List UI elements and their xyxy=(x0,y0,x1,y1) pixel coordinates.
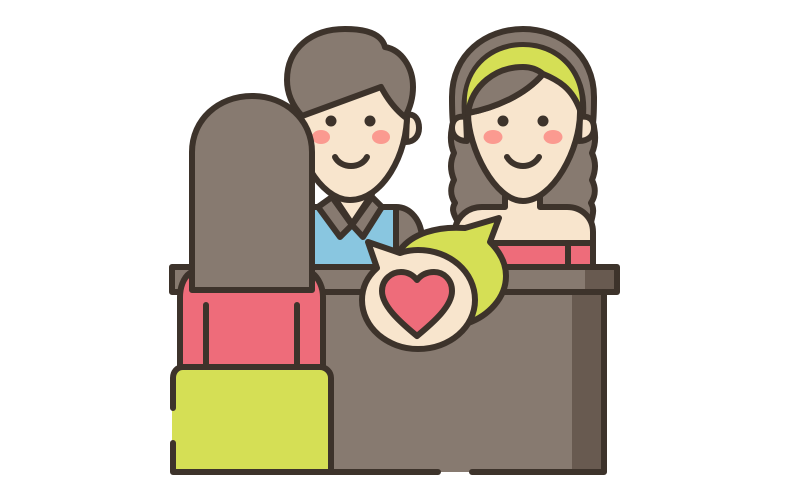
customer hair xyxy=(192,96,312,290)
customer top xyxy=(180,273,323,367)
desk xyxy=(172,267,618,472)
customer chair xyxy=(172,367,331,473)
speech bubble: heart xyxy=(362,242,475,349)
customer seen from behind xyxy=(172,96,331,473)
woman face details xyxy=(484,116,562,144)
man face details xyxy=(312,116,390,144)
woman behind desk xyxy=(451,29,595,268)
speech bubble: green xyxy=(400,218,506,323)
icon: heart xyxy=(382,272,452,336)
man behind desk xyxy=(287,29,422,268)
